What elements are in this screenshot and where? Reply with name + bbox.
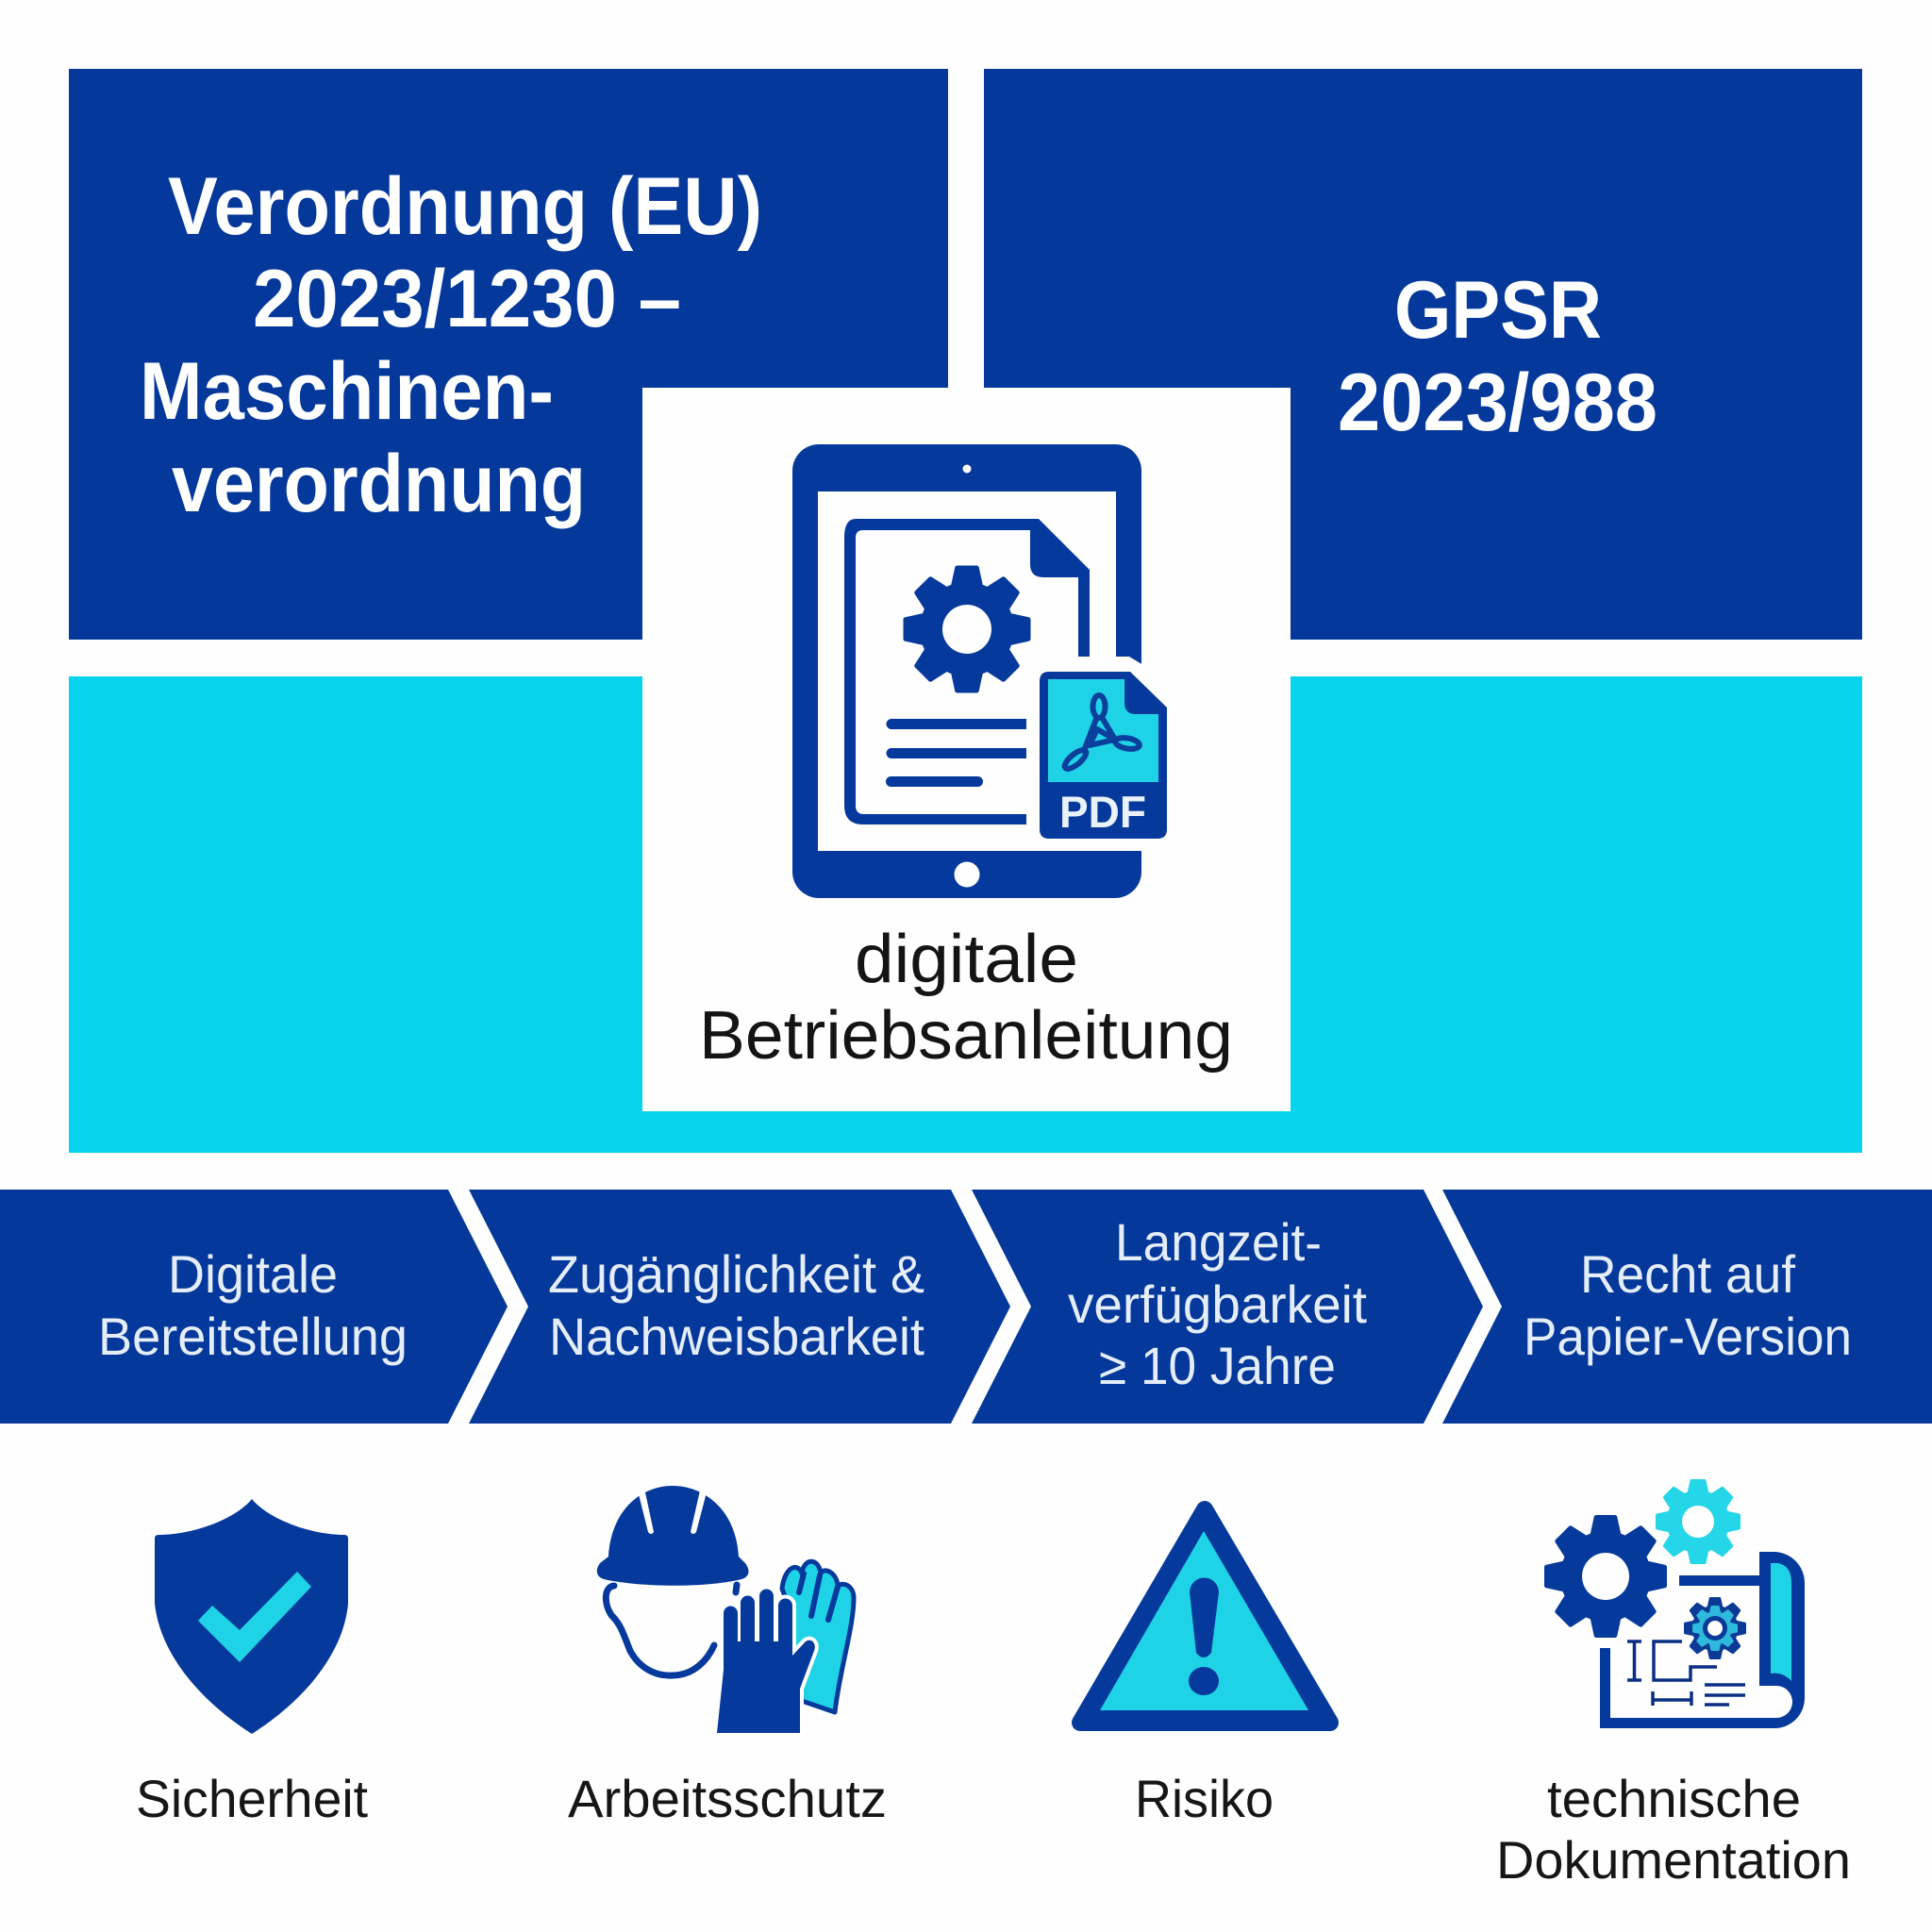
heading: GPSR 2023/988: GPSR	[1394, 265, 1602, 356]
topic: Arbeitsschutz: Arbeitsschutz	[568, 1769, 887, 1828]
helmet	[597, 1486, 748, 1586]
heading: digitale Betriebsanleitung	[699, 922, 1233, 1074]
icon: document gear	[906, 568, 1028, 691]
panel: GPSR	[984, 69, 1862, 640]
heading: digitale Betriebsanleitung: Betriebsanleitung	[699, 998, 1233, 1074]
step: Recht auf Papier-Version: Recht auf	[1580, 1244, 1795, 1304]
heading: Verordnung (EU) 2023/1230 – Maschinenverordnung: Maschinen-	[140, 346, 554, 437]
small gear	[1685, 1598, 1745, 1658]
navy glove	[717, 1589, 815, 1733]
heading: Verordnung (EU) 2023/1230 – Maschinenverordnung: Verordnung (EU)	[168, 161, 762, 252]
Acrobat symbol	[1062, 695, 1141, 772]
label: technische Dokumentation	[1496, 1769, 1851, 1890]
step: Recht auf Papier-Version	[1442, 1190, 1932, 1424]
icon: document outline	[844, 519, 1090, 824]
step: Langzeitverfügbarkeit: ≥ 10 Jahre	[1099, 1336, 1336, 1395]
topic: Arbeitsschutz	[568, 1486, 887, 1828]
icon: tablet	[792, 444, 1143, 898]
heading: Verordnung (EU) 2023/1230 – Maschinenverordnung: verordnung	[172, 439, 586, 529]
blueprint drawing	[1627, 1641, 1745, 1706]
step: Zugänglichkeit & Nachweisbarkeit: Nachweisbarkeit	[549, 1307, 924, 1366]
heading: digitale Betriebsanleitung: digitale	[855, 922, 1078, 997]
icon: tablet with document and PDF	[792, 444, 1167, 898]
icon: PDF file	[1040, 672, 1167, 839]
icon: hard hat and gloves	[597, 1486, 854, 1733]
topic: Sicherheit	[136, 1499, 368, 1828]
icon: PDF file: PDF	[1059, 787, 1146, 837]
cyan glove	[782, 1561, 854, 1712]
process chevrons	[0, 1190, 1932, 1424]
step: Langzeitverfügbarkeit: Langzeit-	[1115, 1212, 1322, 1272]
label: technische Dokumentation: technische	[1547, 1769, 1801, 1828]
topic: Risiko	[1080, 1509, 1330, 1828]
step: Zugänglichkeit & Nachweisbarkeit	[469, 1190, 1010, 1424]
topic: technische Dokumentation	[1496, 1481, 1851, 1890]
step: Digitale Bereitstellung	[0, 1190, 508, 1424]
icon: shield with check	[155, 1499, 348, 1734]
heading: Verordnung (EU) 2023/1230 – Maschinenverordnung	[140, 161, 762, 529]
panel: Maschinenverordnung	[69, 69, 948, 640]
topic: Risiko: Risiko	[1135, 1769, 1274, 1828]
icon: gears and blueprint	[1547, 1481, 1805, 1728]
blueprint sheet	[1600, 1552, 1805, 1728]
document text lines	[886, 719, 1026, 787]
cyan gear	[1657, 1481, 1739, 1562]
heading: GPSR 2023/988: 2023/988	[1338, 358, 1657, 448]
step: Langzeitverfügbarkeit	[972, 1190, 1483, 1424]
step: Recht auf Papier-Version: Papier-Version	[1524, 1307, 1852, 1366]
icon: warning triangle	[1080, 1509, 1330, 1723]
label: technische Dokumentation: Dokumentation	[1496, 1830, 1851, 1890]
panel: cyan band	[69, 676, 1862, 1153]
topic: Sicherheit: Sicherheit	[136, 1769, 368, 1828]
step: Langzeitverfügbarkeit: verfügbarkeit	[1068, 1274, 1367, 1334]
face strap	[606, 1585, 737, 1675]
step: Zugänglichkeit & Nachweisbarkeit: Zugänglichkeit &	[548, 1244, 924, 1304]
step: Digitale Bereitstellung: Bereitstellung	[98, 1307, 408, 1366]
step: Digitale Bereitstellung: Digitale	[168, 1244, 338, 1304]
panel: central white card	[642, 388, 1291, 1111]
big navy gear	[1547, 1518, 1664, 1635]
heading: GPSR 2023/988	[1338, 265, 1657, 448]
heading: Verordnung (EU) 2023/1230 – Maschinenverordnung: 2023/1230 –	[253, 254, 681, 344]
